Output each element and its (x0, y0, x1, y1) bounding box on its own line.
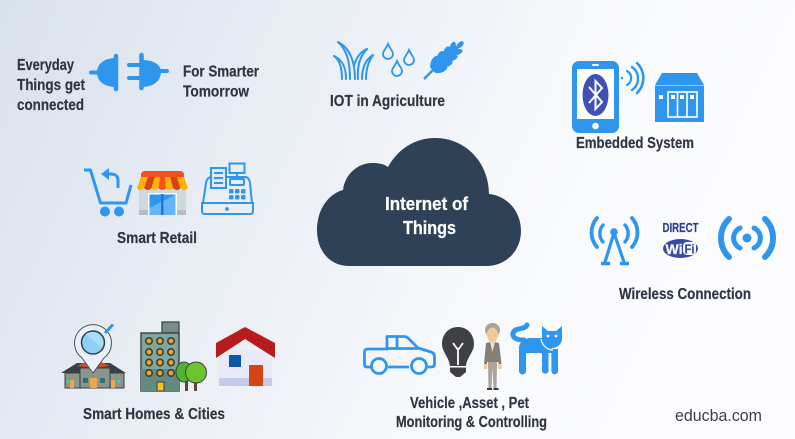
text: smart homes and cities: Smart Homes & Cities (83, 406, 225, 423)
text: everyday things get connected: Everyday (17, 57, 74, 74)
icon: plug and socket (91, 55, 167, 89)
icon: houses with location pin (61, 324, 126, 388)
icon: light bulb (442, 327, 474, 377)
icon: wi-fi direct logo (662, 221, 699, 258)
text: for smarter tomorrow: For Smarter (183, 64, 259, 80)
icon: wheat (424, 34, 471, 79)
text: everyday things get connected: Things get (17, 77, 86, 94)
text: educba.com: educba.com (675, 406, 762, 425)
text: vehicle asset pet monitoring and controlling: Vehicle ,Asset , Pet (410, 395, 530, 412)
text: everyday things get connected: connected (17, 97, 84, 114)
icon: wi-fi direct logo: Fi (684, 242, 694, 256)
text: for smarter tomorrow: Tomorrow (183, 84, 249, 100)
icon: wi-fi direct logo: Wi (666, 241, 682, 257)
icon: wi-fi direct logo: DIRECT (662, 221, 699, 235)
icon: cash register (202, 164, 253, 214)
cloud title: Things (403, 218, 456, 238)
text: vehicle asset pet monitoring and controlling: Monitoring & Controlling (396, 414, 547, 431)
icon: embedded system box (655, 73, 704, 122)
icon: bluetooth phone (572, 61, 643, 133)
icon: grass (334, 42, 373, 79)
text: iot in agriculture: IOT in Agriculture (330, 93, 445, 110)
cloud: internet of things (317, 138, 521, 266)
icon: office building with trees (141, 322, 206, 391)
icon: store front (137, 171, 188, 215)
icon: business person (484, 323, 502, 390)
icon: antenna tower (592, 218, 637, 264)
text: smart retail: Smart Retail (117, 230, 197, 247)
icon: pickup truck (364, 336, 434, 374)
icon: red roof house (216, 327, 275, 386)
icon: wireless signal (721, 219, 773, 257)
icon: water drops (383, 44, 414, 76)
text: wireless connection: Wireless Connection (619, 286, 751, 303)
icon: shopping cart with return arrow (84, 168, 131, 216)
text: embedded system: Embedded System (576, 135, 694, 152)
icon: cat (513, 325, 562, 375)
cloud title: Internet of (385, 194, 469, 214)
